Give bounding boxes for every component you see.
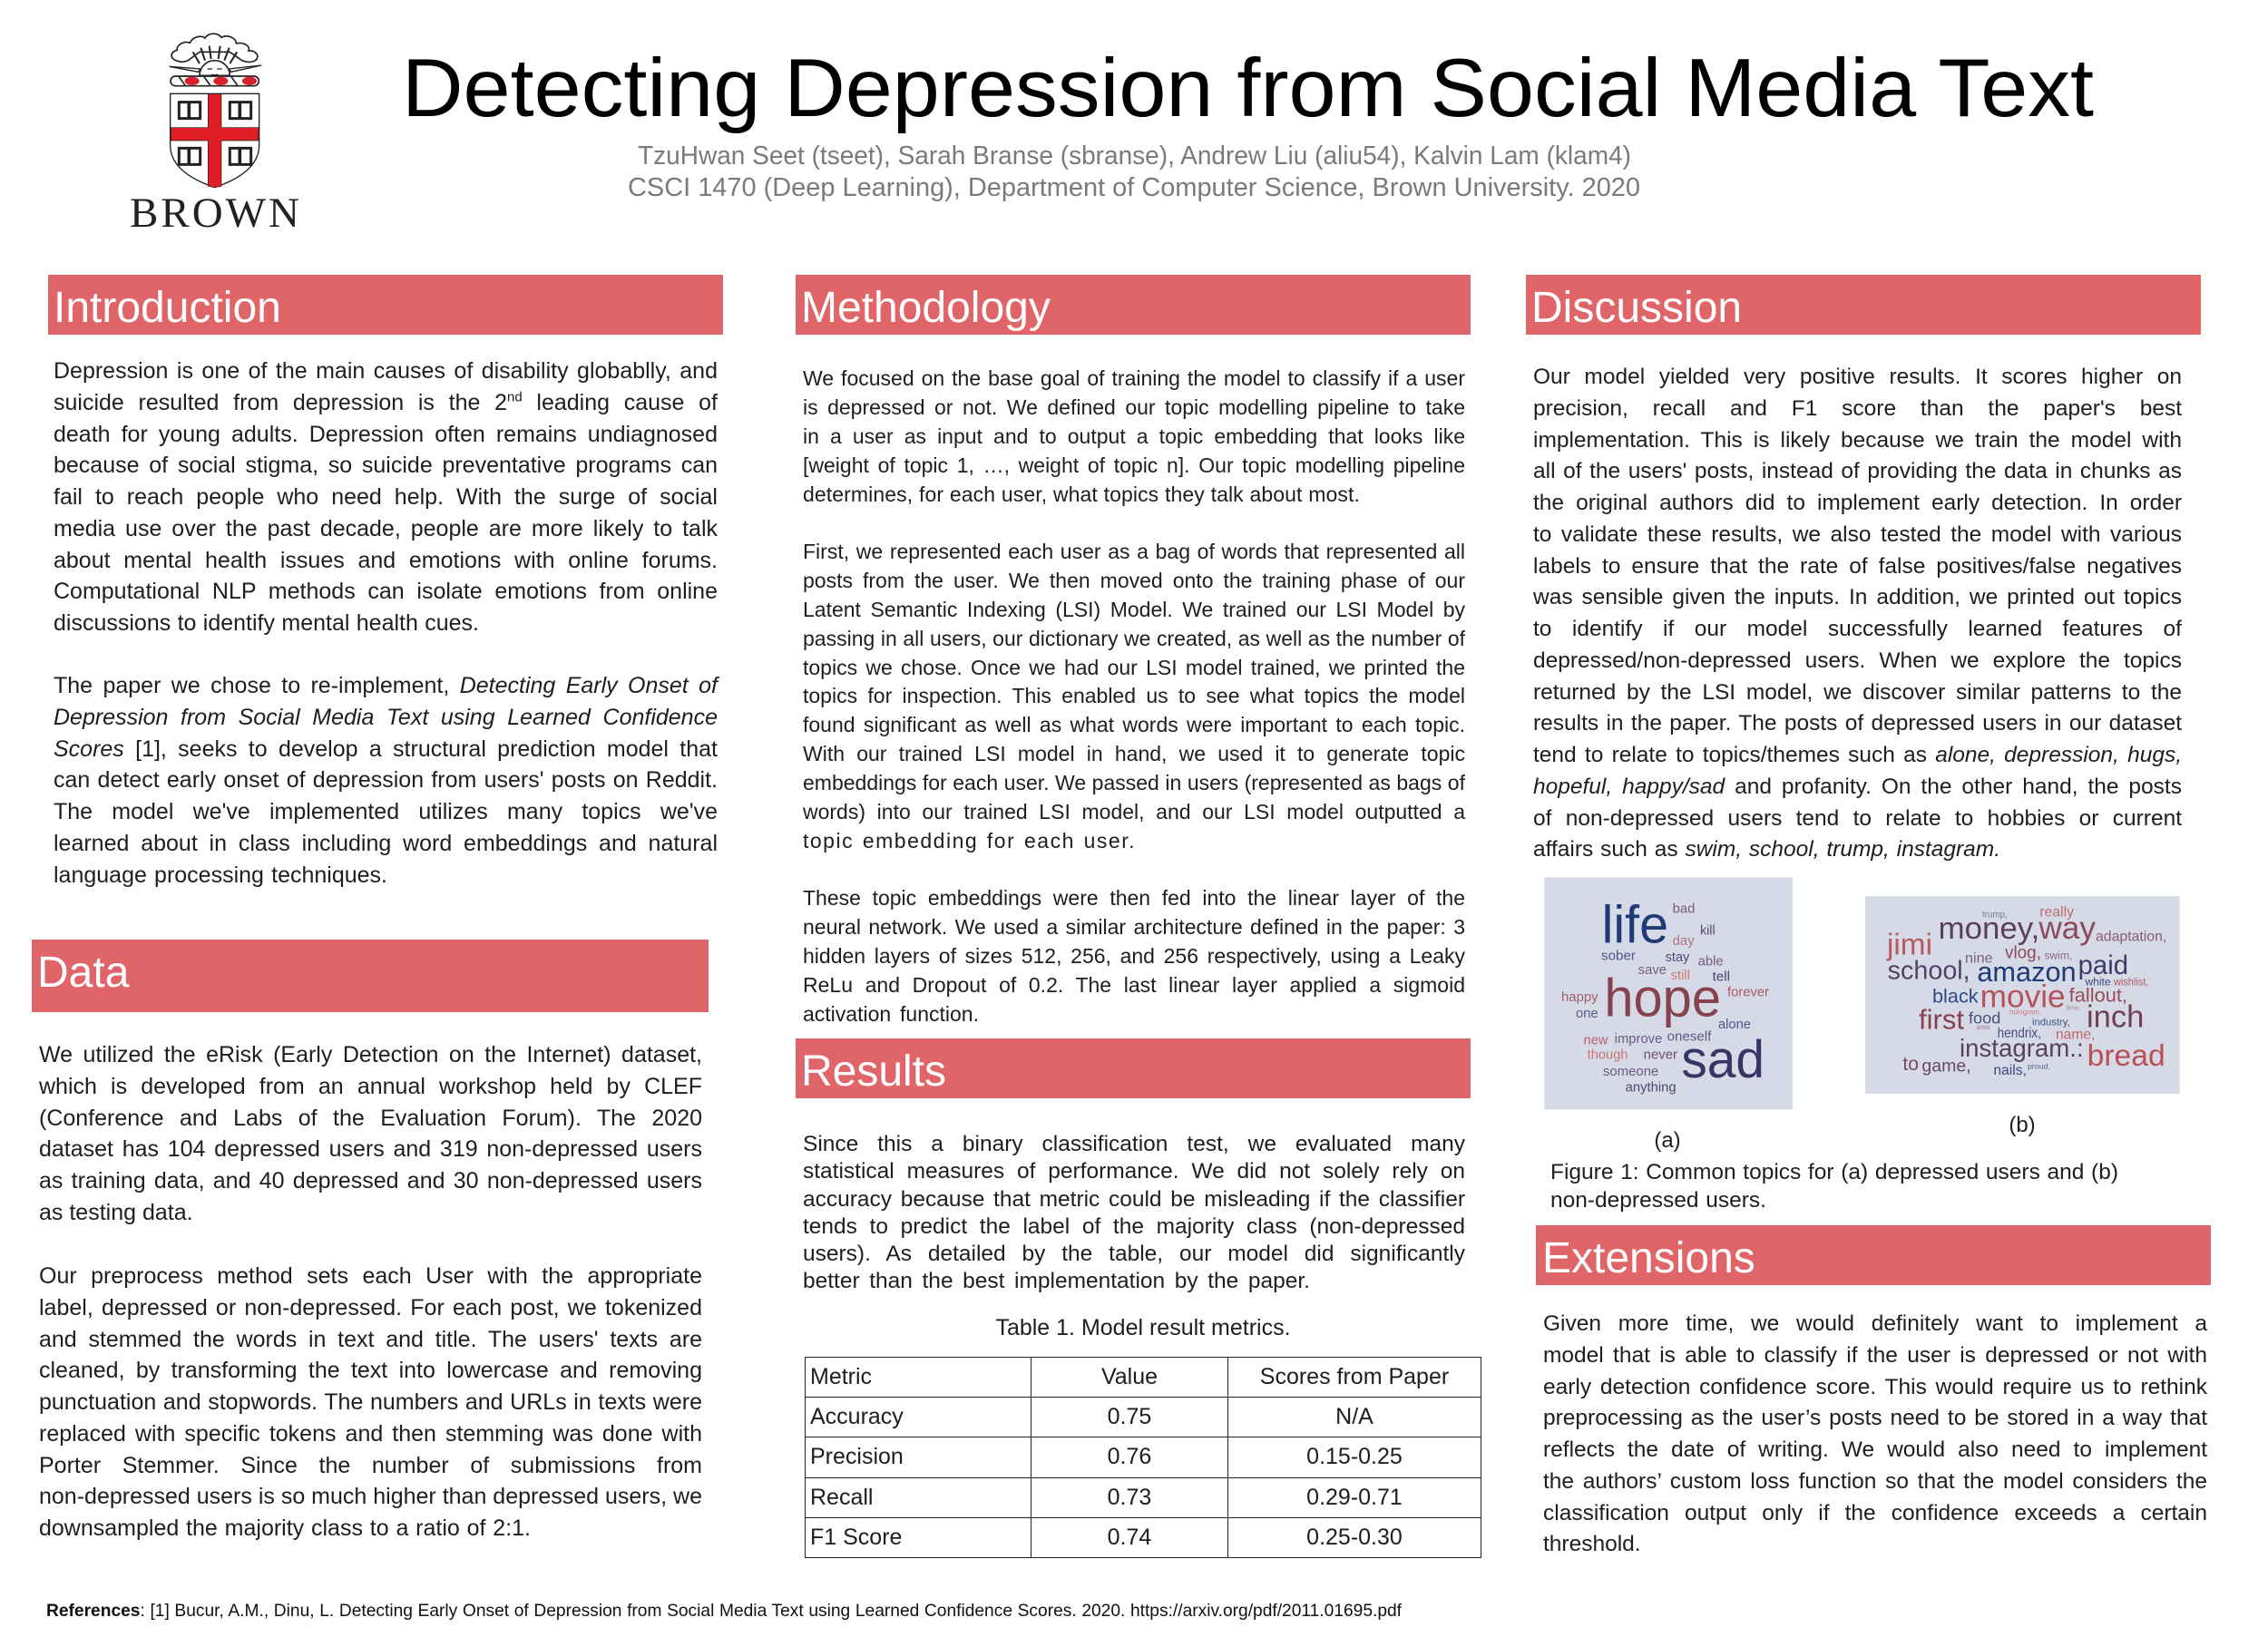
word cloud (b) non-depressed users: first	[1919, 1004, 1964, 1036]
heading: Introduction: Introduction	[54, 284, 281, 332]
word cloud (b) non-depressed users: nails,	[1993, 1063, 2027, 1078]
word cloud (a) depressed users: stay	[1666, 950, 1690, 965]
word cloud (a) depressed users: hope	[1604, 968, 1721, 1028]
word cloud (a) depressed users: life	[1602, 895, 1668, 954]
heading: Extensions: Extensions	[1542, 1234, 1755, 1282]
word cloud (b) non-depressed users: bread	[2087, 1039, 2165, 1073]
text: results paragraph: Since this a binary classification test, we evaluated many	[803, 1132, 1465, 1156]
title: Detecting Depression from Social Media Text	[402, 43, 2094, 134]
text: introduction paragraph 2: language processing techniques.	[54, 862, 387, 887]
text: introduction paragraph 1: suicide resulted from depression is the 2nd leading cause of	[54, 389, 718, 415]
table caption: Table 1. Model result metrics.	[995, 1315, 1291, 1340]
heading: Introduction	[48, 275, 723, 335]
word cloud (a) depressed users: oneself	[1667, 1029, 1712, 1045]
table: model result metrics: Metric	[810, 1364, 872, 1389]
text: extensions paragraph: model that is able to classify if the user is depressed or not with	[1543, 1343, 2207, 1368]
text: data paragraph 2: Our preprocess method sets each User with the appropriate	[39, 1263, 702, 1289]
text: introduction paragraph 2: Scores [1], seeks to develop a structural prediction model that	[54, 736, 718, 762]
word cloud (a) depressed users: day	[1673, 933, 1695, 949]
word cloud (a) depressed users: kill	[1700, 923, 1716, 939]
text: results paragraph: better than the best implementation by the paper.	[803, 1269, 1310, 1293]
text: data paragraph 2: Porter Stemmer. Since the number of submissions from	[39, 1453, 702, 1478]
word cloud (b) non-depressed users: food	[1969, 1009, 2000, 1027]
text: data paragraph 2: replaced with specific tokens and then stemming was done with	[39, 1421, 702, 1447]
text: methodology paragraph 3: activation function.	[803, 1002, 979, 1026]
text: methodology paragraph 2: topics we chose. Once we had our LSI model trained, we printed the	[803, 656, 1465, 679]
text: extensions paragraph: preprocessing as the user’s posts need to be stored in a way that	[1543, 1406, 2207, 1430]
text: data paragraph 1: as testing data.	[39, 1200, 193, 1225]
text: introduction paragraph 1: fail to reach people who need help. With the surge of social	[54, 484, 718, 510]
text: discussion paragraph: hopeful, happy/sad and profanity. On the other hand, the posts	[1533, 775, 2182, 799]
text: methodology paragraph 2: words) into our trained LSI model, and our LSI model outputted a	[803, 800, 1465, 823]
text: data paragraph 2: non-depressed users is so much higher than depressed users, we	[39, 1484, 702, 1509]
word cloud (a) depressed users: tell	[1713, 970, 1730, 985]
word cloud (a) depressed users: never	[1644, 1047, 1677, 1062]
text: data paragraph 1: as training data, and 40 depressed and 30 non-depressed users	[39, 1168, 702, 1194]
word cloud (b) non-depressed users: instagram.:	[1960, 1034, 2084, 1062]
text: discussion paragraph: to identify if our model successfully learned features of	[1533, 617, 2182, 641]
word cloud (a) depressed users: forever	[1727, 984, 1769, 999]
word cloud (b) non-depressed users: way	[2038, 911, 2096, 946]
word cloud (b) non-depressed users: jimi	[1886, 928, 1932, 961]
table: model result metrics: Value	[1101, 1364, 1158, 1389]
text: extensions paragraph: classification output only if the confidence exceeds a certain	[1543, 1500, 2207, 1525]
figure caption: Figure 1: Common topics for (a) depressed users and (b)	[1550, 1160, 2118, 1184]
word cloud (b) non-depressed users: inch	[2087, 1000, 2144, 1035]
text: extensions paragraph: early detection confidence score. This would require us to rethink	[1543, 1375, 2207, 1398]
table: model result metrics: 0.73	[1108, 1485, 1151, 1510]
word cloud (b) non-depressed users: wishlist,	[2113, 977, 2148, 989]
word cloud (b) non-depressed users: artist	[1976, 1025, 1989, 1031]
word cloud (a) depressed users	[1544, 877, 1793, 1109]
text: data paragraph 1: (Conference and Labs of the Evaluation Forum). The 2020	[39, 1105, 702, 1130]
table: model result metrics: Precision	[810, 1444, 904, 1469]
wordmark BROWN: BROWN	[130, 190, 299, 237]
text: methodology paragraph 1: determines, for each user, what topics they talk about most.	[803, 482, 1360, 506]
word cloud (a) depressed users: sober	[1601, 948, 1636, 963]
word cloud (a) depressed users: anything	[1626, 1079, 1677, 1095]
word cloud (a) depressed users: save	[1638, 962, 1667, 978]
text: discussion paragraph: to validate these results, we also tested the model with various	[1533, 522, 2182, 547]
text: methodology paragraph 2: posts from the user. We then moved onto the training phase of our	[803, 569, 1465, 592]
text: extensions paragraph: Given more time, we would definitely want to implement a	[1543, 1311, 2207, 1336]
text: introduction paragraph 1: death for young adults. Depression often remains undiagnosed	[54, 421, 718, 446]
text: data paragraph 1: We utilized the eRisk (Early Detection on the Internet) dataset,	[39, 1042, 702, 1067]
text: methodology paragraph 2: Latent Semantic Indexing (LSI) Model. We trained our LSI Model by	[803, 598, 1465, 621]
word cloud (a) depressed users: able	[1698, 954, 1724, 970]
text: methodology paragraph 2: embeddings for each user. We passed in users (represented as bags of	[803, 771, 1465, 794]
books	[179, 102, 251, 164]
figure caption: non-depressed users.	[1550, 1188, 1766, 1212]
heading: Methodology: Methodology	[801, 284, 1051, 332]
word cloud (b) non-depressed users: black	[1932, 984, 1979, 1007]
text: discussion paragraph: affairs such as swim, school, trump, instagram.	[1533, 837, 2000, 862]
word cloud (a) depressed users: one	[1576, 1006, 1598, 1021]
text: introduction paragraph 1: discussions to identify mental health cues.	[54, 610, 479, 636]
text: introduction paragraph 2: Depression from Social Media Text using Learned Confidence	[54, 705, 718, 730]
affiliation: CSCI 1470 (Deep Learning), Department of Computer Science, Brown University. 2020	[628, 173, 1640, 202]
text: discussion paragraph: returned by the LSI model, we discover similar patterns to the	[1533, 680, 2182, 704]
word cloud (b) non-depressed users: swim,	[2044, 949, 2072, 961]
crest wings	[170, 65, 261, 72]
table: model result metrics: 0.25-0.30	[1306, 1525, 1403, 1550]
heading: Data	[32, 940, 709, 1012]
word cloud (a) depressed users: sad	[1681, 1030, 1765, 1089]
heading: Discussion: Discussion	[1531, 284, 1742, 332]
text: methodology paragraph 1: [weight of topic 1, …, weight of topic n]. Our topic modelling pipeline	[803, 453, 1465, 477]
heading: Results: Results	[801, 1047, 946, 1096]
text: results paragraph: users). As detailed by the table, our model did significantly	[803, 1242, 1465, 1266]
word cloud (a) depressed users: alone	[1718, 1017, 1751, 1032]
text: methodology paragraph 3: These topic embeddings were then fed into the linear layer of the	[803, 886, 1465, 910]
word cloud (b) non-depressed users: school,	[1888, 956, 1970, 985]
sun face	[208, 69, 222, 75]
text: discussion paragraph: precision, recall and F1 score than the paper's best	[1533, 396, 2182, 421]
heading: Results	[796, 1038, 1471, 1098]
word cloud (b) non-depressed users: industry,	[2032, 1018, 2070, 1028]
text: methodology paragraph 1: is depressed or not. We defined our topic modelling pipeline to take	[803, 395, 1465, 419]
heading: Data: Data	[37, 949, 129, 997]
text: methodology paragraph 3: ReLu and Dropout of 0.2. The last linear layer applied a sigmoid	[803, 973, 1465, 997]
text: discussion paragraph: was sensible given the inputs. In addition, we printed out topics	[1533, 585, 2182, 609]
word cloud (b) non-depressed users: really	[2039, 905, 2074, 921]
header band	[130, 33, 2094, 237]
text: extensions paragraph: reflects the date of writing. We would also need to implement	[1543, 1437, 2207, 1462]
word cloud (b) non-depressed users: movie	[1980, 979, 2066, 1015]
word cloud (a) depressed users: happy	[1561, 989, 1598, 1005]
text: methodology paragraph 2: First, we represented each user as a bag of words that represented all	[803, 540, 1465, 563]
text: data paragraph 2	[39, 1263, 702, 1541]
text: data paragraph 2: and stemmed the words in text and title. The users' texts are	[39, 1326, 702, 1351]
references: References: [1] Bucur, A.M., Dinu, L. Detecting Early Onset of Depression from Social Media Text using Learned Confidence Scores. 2020. https://arxiv.org/pdf/2011.01695.pdf	[46, 1602, 1402, 1621]
label (b): (b)	[2009, 1113, 2036, 1137]
table: model result metrics: Accuracy	[810, 1404, 904, 1429]
shield cross	[171, 94, 259, 188]
word cloud (b) non-depressed users: fallout,	[2069, 984, 2127, 1007]
text: results paragraph	[803, 1132, 1465, 1293]
table: model result metrics: 0.75	[1108, 1404, 1151, 1429]
word cloud (b) non-depressed users: hendrix,	[1998, 1026, 2041, 1041]
text: data paragraph 1: which is developed from an annual workshop held by CLEF	[39, 1074, 702, 1099]
text: discussion paragraph: Our model yielded very positive results. It scores higher on	[1533, 365, 2182, 389]
word cloud (b) non-depressed users: white	[2084, 976, 2111, 989]
word cloud (b) non-depressed users: amazon	[1977, 957, 2077, 988]
word cloud (b) non-depressed users: trump,	[1982, 911, 2008, 921]
table: model result metrics: F1 Score	[810, 1525, 902, 1550]
table: model result metrics: Scores from Paper	[1260, 1364, 1449, 1389]
text: introduction paragraph 1: media use over the past decade, people are more likely to talk	[54, 516, 718, 541]
text: methodology paragraph 2: found significant as well as what words were important to each topic.	[803, 713, 1465, 736]
text: methodology paragraph 2	[803, 540, 1466, 853]
crest cloud	[171, 34, 258, 62]
table: model result metrics	[805, 1357, 1481, 1558]
word cloud (b) non-depressed users	[1865, 896, 2180, 1094]
text: data paragraph 2: punctuation and stopwords. The numbers and URLs in texts were	[39, 1389, 702, 1415]
table: model result metrics: 0.29-0.71	[1306, 1485, 1403, 1510]
word cloud (a) depressed users: still	[1671, 968, 1690, 983]
text: extensions paragraph: the authors’ custom loss function so that the model considers the	[1543, 1469, 2207, 1494]
word cloud (b) non-depressed users: nine	[1965, 950, 1993, 966]
text: introduction paragraph 2: can detect early onset of depression from users' posts on Reddit.	[54, 767, 718, 793]
text: discussion paragraph: labels to ensure that the rate of false positives/false negatives	[1533, 553, 2182, 579]
label (a): (a)	[1654, 1128, 1681, 1153]
text: introduction paragraph 1: because of social stigma, so suicide preventative programs can	[54, 453, 718, 478]
authors: TzuHwan Seet (tseet), Sarah Branse (sbranse), Andrew Liu (aliu54), Kalvin Lam (klam4)	[638, 141, 1631, 171]
word cloud (a) depressed users: though	[1588, 1047, 1628, 1062]
text: methodology paragraph 2: topics for inspection. This enabled us to see what topics the model	[803, 684, 1465, 707]
text: data paragraph 2: label, depressed or non-depressed. For each post, we tokenized	[39, 1295, 702, 1320]
text: data paragraph 1: dataset has 104 depressed users and 319 non-depressed users	[39, 1136, 702, 1162]
table: model result metrics: 0.74	[1108, 1525, 1151, 1550]
word cloud (a) depressed users: new	[1584, 1034, 1608, 1048]
text: results paragraph: statistical measures of performance. We did not solely rely on	[803, 1159, 1465, 1184]
wreath	[171, 76, 259, 86]
text: extensions paragraph: threshold.	[1543, 1532, 1641, 1556]
text: introduction paragraph 2	[54, 673, 720, 887]
heading: Extensions	[1536, 1225, 2211, 1285]
icon: Brown University logo	[170, 34, 261, 188]
table: model result metrics: 0.76	[1108, 1444, 1151, 1469]
table: model result metrics: Recall	[810, 1485, 873, 1510]
text: introduction paragraph 1: Computational NLP methods can isolate emotions from online	[54, 579, 718, 604]
text: data paragraph 2: cleaned, by transforming the text into lowercase and removing	[39, 1358, 702, 1383]
word cloud (b) non-depressed users: name,	[2056, 1028, 2095, 1043]
figure caption	[1550, 1160, 2118, 1212]
word cloud (b) non-depressed users: proud,	[2028, 1061, 2050, 1070]
text: methodology paragraph 3: neural network. We used a similar architecture defined in the paper: 3	[803, 915, 1465, 939]
word cloud (b) non-depressed users: time,	[2066, 1003, 2080, 1011]
text: discussion paragraph	[1533, 365, 2182, 862]
text: data paragraph 1	[39, 1042, 702, 1225]
word cloud (b) non-depressed users: paid	[2078, 950, 2128, 980]
text: introduction paragraph 2: The paper we chose to re-implement, Detecting Early Onset of	[54, 673, 718, 698]
text: extensions paragraph	[1543, 1311, 2207, 1556]
text: methodology paragraph 1	[803, 366, 1465, 506]
text: results paragraph: accuracy because that metric could be misleading if the classifier	[803, 1187, 1465, 1212]
word cloud (b) non-depressed users: adaptation,	[2096, 929, 2166, 944]
text: methodology paragraph 3	[803, 886, 1465, 1026]
text: introduction paragraph 1	[54, 358, 718, 636]
text: introduction paragraph 1: about mental health issues and emotions with online forums.	[54, 548, 718, 573]
text: methodology paragraph 2: passing in all users, our dictionary we created, as well as the number of	[803, 627, 1465, 650]
text: discussion paragraph: the original authors did to implement early detection. In order	[1533, 491, 2182, 515]
text: discussion paragraph: depressed/non-depressed users. When we explore the topics	[1533, 648, 2182, 673]
crest rays	[193, 46, 237, 63]
text: methodology paragraph 1: in a user as input and to output a topic embedding that looks like	[803, 424, 1465, 448]
text: discussion paragraph: of non-depressed users tend to relate to hobbies or current	[1533, 805, 2182, 831]
text: introduction paragraph 1: Depression is one of the main causes of disability globablly, and	[54, 358, 718, 384]
table: model result metrics: 0.15-0.25	[1306, 1444, 1403, 1469]
shield	[171, 93, 259, 188]
crest sun	[200, 61, 230, 75]
word cloud (a) depressed users: someone	[1603, 1064, 1658, 1079]
text: discussion paragraph: results in the paper. The posts of depressed users in our dataset	[1533, 711, 2182, 736]
word cloud (b) non-depressed users: to	[1902, 1054, 1919, 1075]
text: discussion paragraph: implementation. This is likely because we train the model with	[1533, 428, 2182, 452]
text: introduction paragraph 2: The model we've implemented utilizes many topics we've	[54, 799, 718, 824]
text: results paragraph: tends to predict the label of the majority class (non-depressed	[803, 1214, 1465, 1239]
word cloud (a) depressed users: bad	[1673, 901, 1695, 917]
word cloud (b) non-depressed users: game,	[1921, 1057, 1971, 1077]
word cloud (b) non-depressed users: vlog,	[2005, 944, 2041, 963]
text: methodology paragraph 3: hidden layers of sizes 512, 256, and 256 respectively, using a Leaky	[803, 944, 1465, 968]
text: methodology paragraph 1: We focused on the base goal of training the model to classify if a user	[803, 366, 1465, 390]
word cloud (a) depressed users: improve	[1615, 1031, 1662, 1047]
table: model result metrics: N/A	[1335, 1404, 1374, 1429]
text: data paragraph 2: downsampled the majority class to a ratio of 2:1.	[39, 1515, 531, 1541]
text: discussion paragraph: all of the users' posts, instead of providing the data in chunks as	[1533, 459, 2182, 483]
word cloud (b) non-depressed users: hologram,	[2009, 1009, 2041, 1017]
heading: Discussion	[1526, 275, 2201, 335]
word cloud (b) non-depressed users: money,	[1939, 911, 2039, 946]
text: discussion paragraph: tend to relate to topics/themes such as alone, depression, hugs,	[1533, 743, 2182, 767]
text: introduction paragraph 2: learned about in class including word embeddings and natural	[54, 831, 718, 856]
heading: Methodology	[796, 275, 1471, 335]
text: methodology paragraph 2: topic embedding for each user.	[803, 829, 1136, 853]
text: methodology paragraph 2: With our trained LSI model in hand, we used it to generate topic	[803, 742, 1465, 765]
